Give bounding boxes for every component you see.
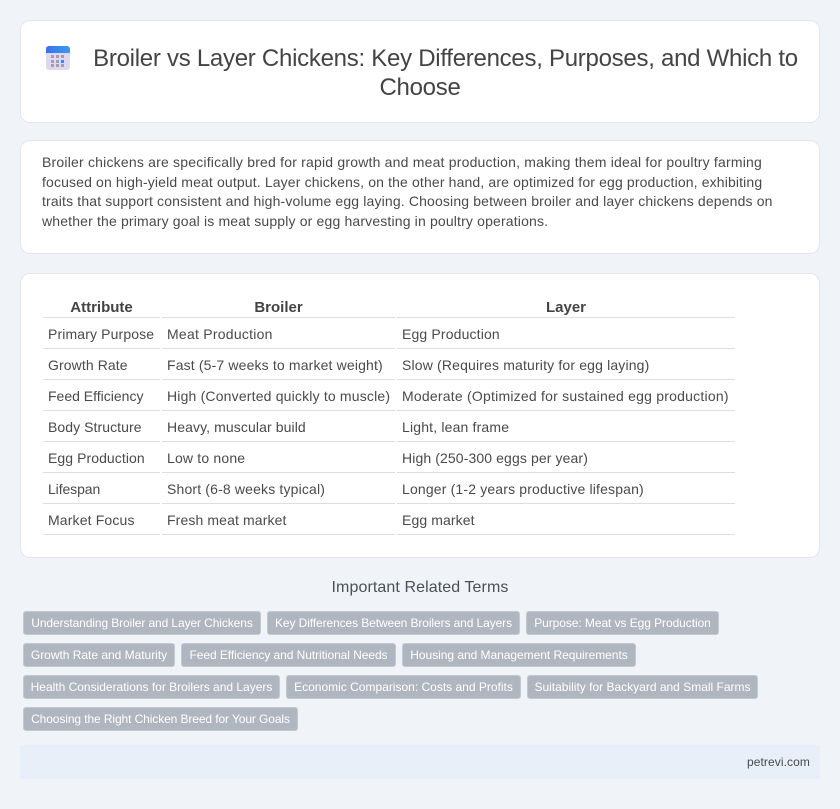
table header: broiler: Broiler bbox=[254, 299, 303, 316]
row: growth rate: Growth Rate bbox=[48, 357, 128, 373]
heading: related terms: Important Related Terms bbox=[332, 579, 508, 596]
row: egg production: Egg Production bbox=[48, 450, 145, 466]
header panel bbox=[20, 20, 820, 123]
tag bbox=[23, 643, 175, 667]
footer bbox=[20, 745, 820, 779]
title: Broiler vs Layer Chickens: Key Differences, Purposes, and Which to bbox=[93, 45, 798, 72]
tag: Choosing the Right Chicken Breed for Your Goals bbox=[31, 712, 290, 726]
table header: attribute: Attribute bbox=[70, 299, 133, 316]
title bbox=[93, 45, 798, 101]
intro text bbox=[20, 140, 820, 254]
tag bbox=[286, 675, 521, 699]
footer text: petrevi.com bbox=[747, 755, 810, 769]
row: feed efficiency: Feed Efficiency bbox=[48, 388, 143, 404]
row: feed efficiency layer: Moderate (Optimized for sustained egg production) bbox=[402, 388, 729, 404]
tag: Suitability for Backyard and Small Farms bbox=[534, 680, 751, 694]
row: growth rate broiler: Fast (5-7 weeks to market weight) bbox=[167, 357, 383, 373]
tag: Feed Efficiency and Nutritional Needs bbox=[190, 648, 387, 662]
tag bbox=[23, 675, 280, 699]
tags: related terms bbox=[23, 611, 758, 731]
table header: layer: Layer bbox=[546, 299, 586, 316]
tag: Purpose: Meat vs Egg Production bbox=[534, 616, 711, 630]
row: body structure broiler: Heavy, muscular build bbox=[167, 419, 306, 435]
row: market focus layer: Egg market bbox=[402, 512, 475, 528]
tag: Health Considerations for Broilers and Layers bbox=[31, 680, 272, 694]
tag bbox=[527, 675, 758, 699]
title: Choose bbox=[379, 74, 461, 101]
row: egg production layer: High (250-300 eggs per year) bbox=[402, 450, 588, 466]
row: market focus broiler: Fresh meat market bbox=[167, 512, 287, 528]
panel: comparison table bbox=[20, 273, 820, 558]
tag: Housing and Management Requirements bbox=[410, 648, 628, 662]
tag: Economic Comparison: Costs and Profits bbox=[294, 680, 513, 694]
intro text: traits that support consistent and high-volume egg laying. Choosing between broiler and layer chickens depends on bbox=[42, 193, 773, 209]
tag bbox=[267, 611, 520, 635]
row: egg production broiler: Low to none bbox=[167, 450, 245, 466]
row: primary purpose: Primary Purpose bbox=[48, 326, 154, 342]
intro text: Broiler chickens are specifically bred for rapid growth and meat production, making them ideal for poultry farming bbox=[42, 154, 762, 170]
intro text: focused on high-yield meat output. Layer chickens, on the other hand, are optimized for egg production, exhibiting bbox=[42, 174, 762, 190]
tag bbox=[526, 611, 719, 635]
row: growth rate layer: Slow (Requires maturity for egg laying) bbox=[402, 357, 649, 373]
row: feed efficiency broiler: High (Converted quickly to muscle) bbox=[167, 388, 390, 404]
row: body structure: Body Structure bbox=[48, 419, 142, 435]
tag bbox=[402, 643, 636, 667]
row: lifespan: Lifespan bbox=[48, 481, 100, 497]
tag bbox=[23, 611, 261, 635]
row: market focus: Market Focus bbox=[48, 512, 135, 528]
row: body structure layer: Light, lean frame bbox=[402, 419, 509, 435]
tag: Growth Rate and Maturity bbox=[31, 648, 167, 662]
row: primary purpose layer: Egg Production bbox=[402, 326, 500, 342]
row: lifespan broiler: Short (6-8 weeks typical) bbox=[167, 481, 325, 497]
row: primary purpose broiler: Meat Production bbox=[167, 326, 273, 342]
tag bbox=[181, 643, 396, 667]
row: lifespan layer: Longer (1-2 years productive lifespan) bbox=[402, 481, 644, 497]
intro text: whether the primary goal is meat supply or egg harvesting in poultry operations. bbox=[42, 213, 548, 229]
tag: Understanding Broiler and Layer Chickens bbox=[31, 616, 253, 630]
tag bbox=[23, 707, 298, 731]
tag: Key Differences Between Broilers and Layers bbox=[275, 616, 512, 630]
icon: calendar bbox=[46, 46, 70, 70]
